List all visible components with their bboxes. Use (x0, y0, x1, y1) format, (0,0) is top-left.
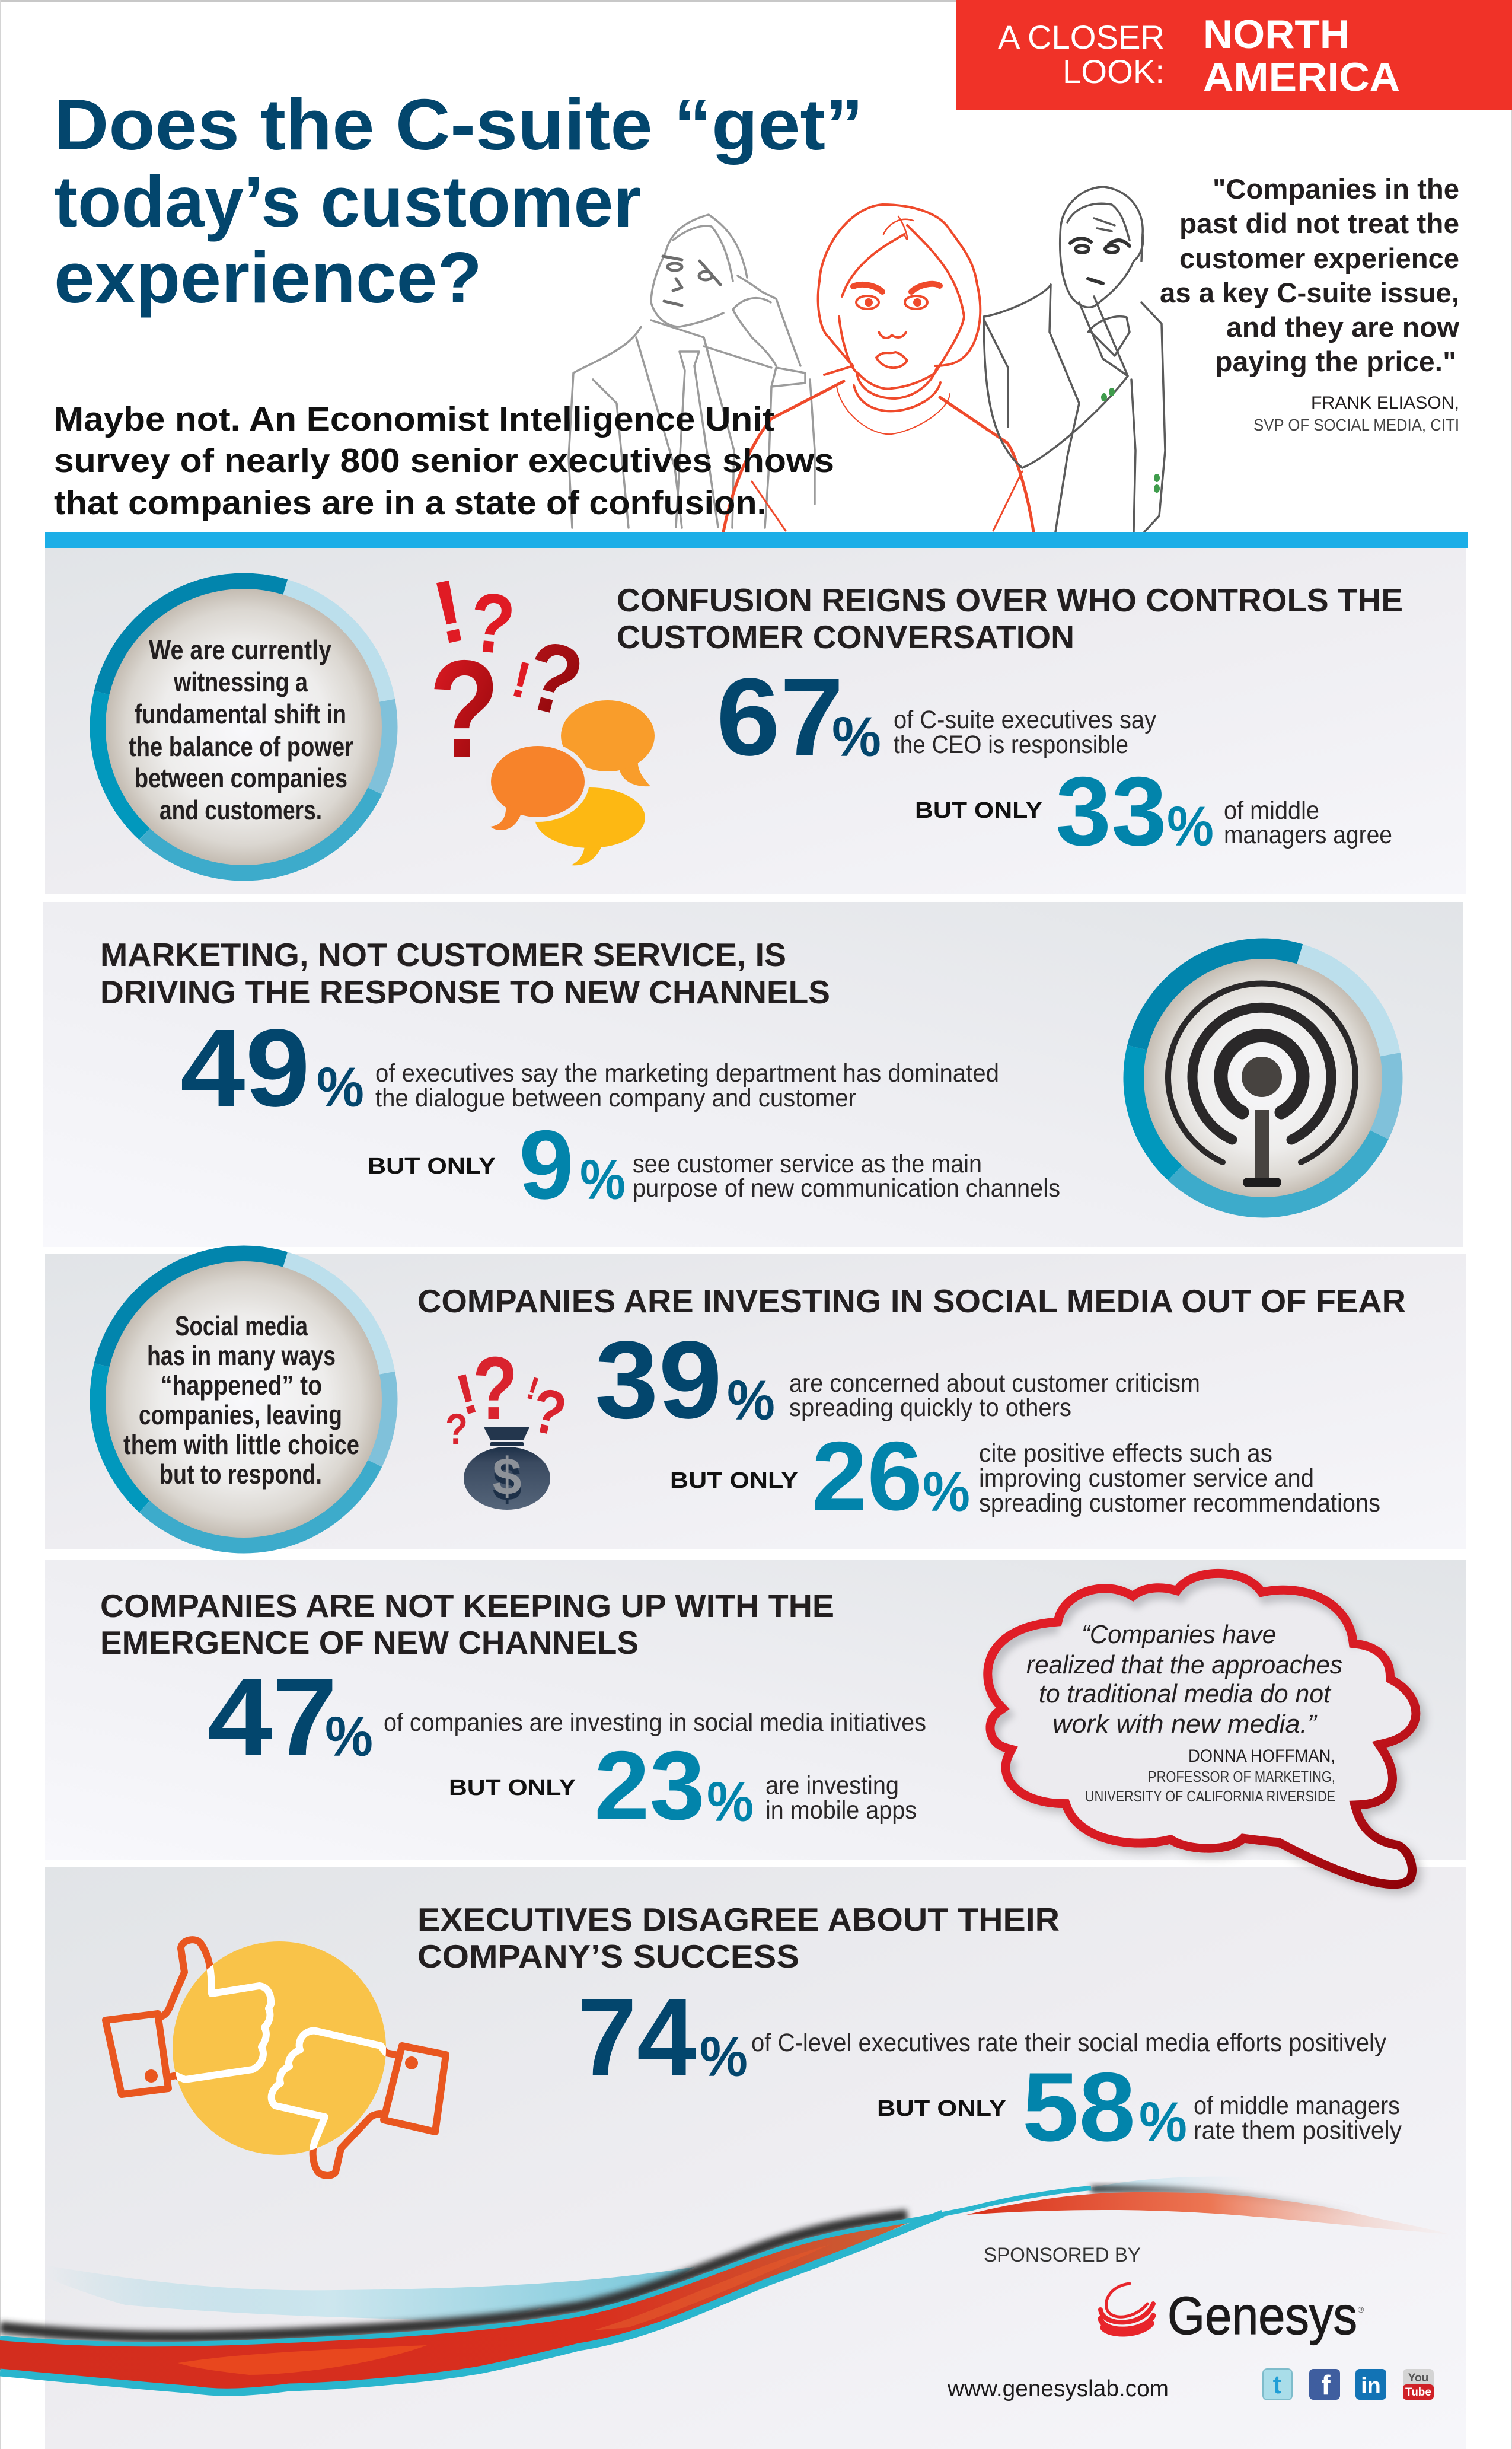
stat: 49%: of executives say the marketing department has dominated (375, 1059, 999, 1088)
callout: quote cloud (983, 1569, 1420, 1889)
heading: CONFUSION REIGNS OVER WHO CONTROLS THE (617, 582, 1403, 618)
region badge: a closer look north america: A CLOSER (998, 18, 1165, 56)
ring badge with quote: the balance of power (129, 731, 353, 762)
callout: quote cloud: to traditional media do not (1039, 1679, 1332, 1708)
title: today’s customer (54, 161, 641, 242)
social media icons: t (1273, 2370, 1282, 2399)
ring badge with quote: fundamental shift in (135, 699, 346, 729)
stat: but only 9% (368, 1110, 1060, 1219)
icon: question and exclamation marks (424, 560, 593, 787)
stat: but only 23%: are investing (765, 1771, 899, 1800)
stat: but only 58%: of middle managers (1194, 2091, 1400, 2120)
stat: but only 23%: BUT ONLY (449, 1775, 576, 1800)
panel: executives disagree (0, 1867, 1466, 2449)
stat: but only 26%: BUT ONLY (670, 1468, 798, 1493)
stat: but only 9%: see customer service as the main (633, 1150, 982, 1178)
website url: www.genesyslab.com (947, 2376, 1169, 2402)
swoosh ribbon (0, 2177, 1450, 2392)
divider bar (45, 532, 1468, 548)
ring badge with quote (37, 521, 450, 933)
stat: 47% (208, 1656, 926, 1778)
quote: Frank Eliason: "Companies in the (1213, 173, 1459, 205)
stat: 47%: % (325, 1705, 373, 1768)
logo: Genesys: Genesys (1168, 2287, 1357, 2346)
stat: but only 33% (915, 757, 1392, 866)
social media icons: Tube (1405, 2386, 1431, 2399)
ring badge with quote: and customers. (160, 795, 322, 825)
social media icons: You (1408, 2372, 1428, 2384)
callout: quote cloud: realized that the approaches (1026, 1650, 1342, 1679)
heading: MARKETING, NOT CUSTOMER SERVICE, IS (100, 936, 786, 973)
stat: but only 26%: 26 (812, 1421, 923, 1530)
stat: 74% (578, 1976, 1386, 2099)
stat: but only 26%: spreading customer recommendations (979, 1489, 1380, 1517)
quote: Frank Eliason: SVP OF SOCIAL MEDIA, CITI (1253, 416, 1459, 434)
stat: but only 33%: BUT ONLY (915, 798, 1042, 823)
quote: Frank Eliason: and they are now (1226, 311, 1459, 343)
social media icons (1263, 2369, 1434, 2400)
icon: thumbs up and thumbs down (106, 1940, 446, 2176)
stat: 67%: of C-suite executives say (894, 706, 1156, 734)
stat: but only 26%: improving customer service and (979, 1464, 1314, 1493)
callout: quote cloud: PROFESSOR OF MARKETING, (1148, 1768, 1335, 1785)
ring badge with quote: them with little choice (123, 1429, 359, 1460)
intro text block: Maybe not. An Economist Intelligence Unit (54, 400, 774, 438)
icon: money bag with question marks: ? (525, 1374, 572, 1450)
stat: 67% (716, 656, 1156, 779)
icon: money bag with question marks: ! (522, 1370, 543, 1407)
stat: 39%: 39 (595, 1319, 722, 1442)
icon: money bag with question marks: $ (493, 1447, 521, 1506)
stat: 39%: are concerned about customer criticism (789, 1369, 1200, 1398)
stat: 67%: 67 (716, 656, 844, 779)
stat: 67%: % (832, 706, 881, 768)
icon: money bag with question marks (445, 1338, 572, 1512)
stat: but only 58% (877, 2052, 1402, 2161)
social media icons: in (1361, 2374, 1381, 2399)
stat: but only 9%: purpose of new communication channels (633, 1174, 1060, 1203)
stat: 67%: the CEO is responsible (894, 731, 1128, 759)
sponsor text: SPONSORED BY (984, 2244, 1141, 2266)
figure: right man in dark grey (984, 187, 1165, 532)
icon: money bag with question marks: ? (445, 1405, 468, 1453)
stat: 74%: % (700, 2026, 748, 2088)
stat: but only 9%: % (580, 1149, 626, 1211)
icon: question and exclamation marks: ? (465, 575, 519, 673)
heading: EXECUTIVES DISAGREE ABOUT THEIR (417, 1901, 1060, 1938)
title: experience? (54, 237, 482, 318)
stat: but only 33%: % (1167, 795, 1214, 858)
quote: Frank Eliason: FRANK ELIASON, (1311, 393, 1459, 413)
stat: 39%: spreading quickly to others (789, 1393, 1071, 1422)
icon: question and exclamation marks: ? (429, 632, 500, 787)
panel: not keeping up (45, 1560, 1466, 1889)
stat: but only 26%: cite positive effects such as (979, 1439, 1272, 1468)
heading: COMPANY’S SUCCESS (417, 1938, 799, 1975)
stat: but only 23%: % (707, 1771, 754, 1833)
heading: EMERGENCE OF NEW CHANNELS (100, 1624, 639, 1661)
heading: COMPANIES ARE NOT KEEPING UP WITH THE (100, 1587, 834, 1624)
heading (417, 1901, 1060, 1975)
stat: but only 58%: BUT ONLY (877, 2096, 1006, 2121)
stat: 74%: 74 (578, 1976, 696, 2099)
region badge: a closer look north america: NORTH (1203, 12, 1350, 57)
intro text block: survey of nearly 800 senior executives shows (54, 442, 834, 480)
panel: marketing not customer service (43, 895, 1463, 1261)
stat: 49% (180, 1007, 999, 1130)
ring badge with quote (37, 1193, 450, 1606)
heading (100, 936, 830, 1010)
stat: but only 23%: in mobile apps (765, 1796, 917, 1825)
panel: investing out of fear (37, 1193, 1466, 1606)
logo: Genesys (1100, 2284, 1364, 2346)
ring badge with quote: but to respond. (160, 1459, 322, 1490)
figure: left man in grey (569, 215, 815, 528)
ring badge with quote: witnessing a (173, 667, 308, 697)
ring badge with quote: We are currently (149, 634, 331, 665)
quote: Frank Eliason (1160, 173, 1459, 434)
stat: but only 58%: % (1139, 2091, 1187, 2154)
figure: woman in red outline (723, 205, 1033, 532)
stat: 49%: % (317, 1056, 364, 1119)
icon: money bag with question marks: $ (493, 1453, 521, 1512)
icon: speech bubbles (490, 700, 655, 865)
ring badge with quote: has in many ways (147, 1340, 336, 1371)
heading (100, 1587, 834, 1661)
icon: question and exclamation marks: ! (424, 560, 474, 663)
stat: but only 26% (670, 1421, 1380, 1530)
quote: Frank Eliason: past did not treat the (1179, 208, 1459, 239)
heading (617, 582, 1403, 655)
stat: 39%: % (727, 1369, 775, 1432)
icon: question and exclamation marks: ? (514, 619, 593, 739)
quote: Frank Eliason: as a key C-suite issue, (1160, 277, 1459, 308)
intro text block: that companies are in a state of confusion. (54, 484, 767, 522)
stat: 47%: 47 (208, 1656, 337, 1778)
icon: broadcast antenna in ring (1080, 895, 1446, 1261)
intro text block (54, 400, 834, 522)
callout: quote cloud: UNIVERSITY OF CALIFORNIA RIVERSIDE (1085, 1787, 1335, 1805)
stat: 74%: of C-level executives rate their social media efforts positively (751, 2029, 1386, 2057)
stat: but only 23% (449, 1731, 917, 1840)
region badge: a closer look north america: LOOK: (1063, 53, 1165, 90)
stat: 49%: the dialogue between company and customer (375, 1084, 856, 1112)
stat: 39% (595, 1319, 1200, 1442)
icon: money bag with question marks: ? (473, 1338, 518, 1439)
stat: but only 33%: managers agree (1224, 821, 1392, 849)
stat: but only 33%: 33 (1055, 757, 1167, 866)
quote: Frank Eliason: paying the price." (1215, 346, 1456, 377)
quote: Frank Eliason: customer experience (1179, 243, 1459, 274)
icon: question and exclamation marks: ! (506, 650, 537, 710)
heading: COMPANIES ARE INVESTING IN SOCIAL MEDIA OUT OF FEAR (417, 1283, 1406, 1319)
ring badge with quote: between companies (135, 763, 347, 793)
social media icons: f (1321, 2370, 1331, 2400)
ring badge with quote: “happened” to (161, 1370, 322, 1401)
stat: but only 9%: 9 (519, 1110, 574, 1219)
ring badge with quote: companies, leaving (139, 1399, 342, 1430)
stat: but only 58%: 58 (1022, 2052, 1135, 2161)
heading: DRIVING THE RESPONSE TO NEW CHANNELS (100, 974, 830, 1010)
title: Does the C-suite “get” (54, 84, 863, 165)
ring badge with quote: Social media (175, 1310, 308, 1341)
logo: Genesys: ® (1358, 2305, 1364, 2314)
stat: but only 26%: % (923, 1461, 970, 1523)
callout: quote cloud: work with new media.” (1052, 1710, 1318, 1739)
icon: money bag with question marks: ! (449, 1361, 484, 1427)
stat: but only 23%: 23 (594, 1731, 705, 1840)
stat: 49%: 49 (180, 1007, 310, 1130)
stat: 47%: of companies are investing in social media initiatives (384, 1708, 926, 1737)
region badge: a closer look north america: AMERICA (1203, 55, 1400, 100)
illustration: three executives (569, 187, 1165, 532)
stat: but only 33%: of middle (1224, 796, 1319, 825)
stat: but only 58%: rate them positively (1194, 2116, 1402, 2145)
stat: but only 9%: BUT ONLY (368, 1154, 496, 1179)
callout: quote cloud: DONNA HOFFMAN, (1188, 1746, 1335, 1766)
title (54, 84, 863, 318)
callout: quote cloud: “Companies have (1082, 1620, 1276, 1649)
panel: confusion reigns (37, 521, 1466, 933)
heading: CUSTOMER CONVERSATION (617, 618, 1074, 655)
region badge: a closer look north america (956, 0, 1512, 110)
